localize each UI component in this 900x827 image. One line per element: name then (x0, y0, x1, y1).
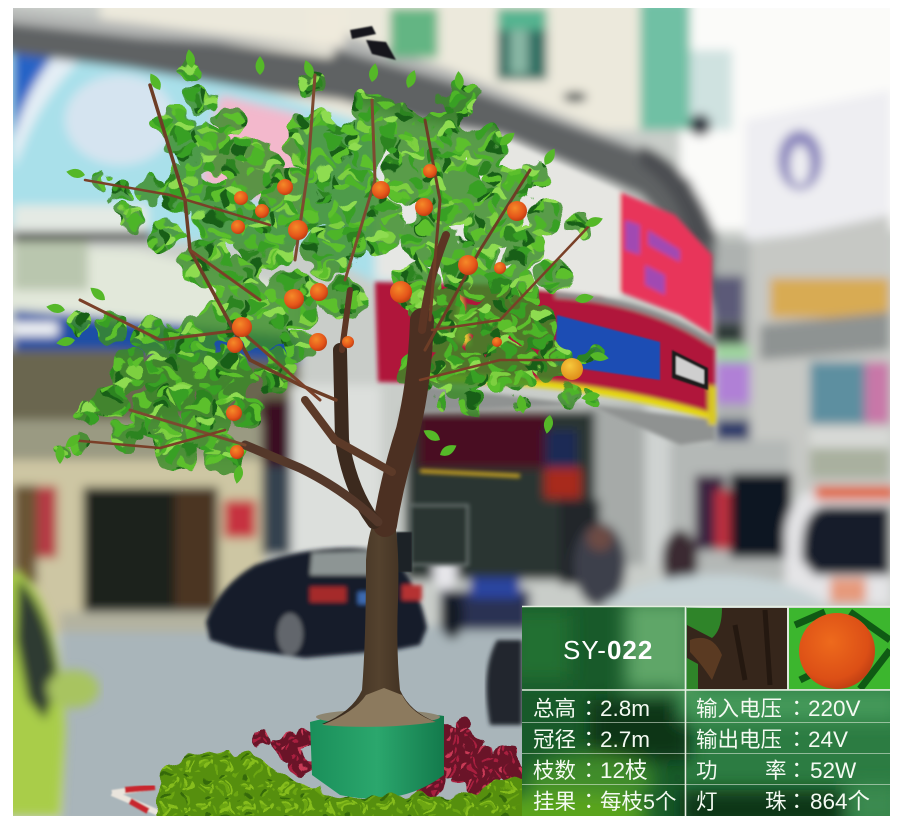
spec: branch count: ： (578, 759, 600, 783)
root flare (322, 688, 436, 727)
person beside trunk (396, 532, 412, 572)
spec: input voltage: 220V (808, 696, 861, 721)
spec: LED beads: ： (786, 790, 808, 814)
pavement (60, 626, 530, 826)
green foreground vehicle (0, 570, 99, 816)
spec: crown diameter: 冠径 (533, 728, 576, 752)
spec: crown diameter: 2.7m (600, 727, 650, 752)
spec: power (696, 758, 857, 783)
parked black car (206, 548, 427, 658)
panel grid lines (522, 606, 890, 816)
bystanders (574, 523, 626, 607)
foreground motorbike (486, 640, 522, 725)
spec: LED beads (696, 789, 870, 814)
street shop fronts (670, 440, 790, 580)
spec: total height: ： (578, 697, 600, 721)
spec: power: 率 (765, 759, 787, 783)
eave band (0, 10, 716, 310)
red fascia and signage (375, 138, 716, 565)
orange photo (789, 608, 890, 689)
spec: total height: 总高 (533, 697, 576, 721)
spec: total height (533, 696, 650, 721)
black sign (672, 350, 708, 390)
spec: input voltage (696, 696, 861, 721)
edge leaves (46, 49, 609, 484)
spec: branch count: 枝数 (533, 759, 576, 783)
spec: fruit: 每枝5个 (600, 790, 676, 814)
spec: input voltage: 输入电压 (696, 697, 782, 721)
shrubs (156, 750, 522, 816)
right billboard (745, 90, 890, 240)
spec: power: 功 (696, 759, 718, 783)
spec: branch count: 12枝 (600, 758, 648, 783)
right buildings (814, 213, 890, 238)
spec: LED beads: 864个 (810, 789, 870, 814)
red plants (253, 721, 523, 798)
oranges (226, 164, 527, 459)
spec: LED beads: 珠 (765, 790, 787, 814)
billboards left (0, 50, 390, 290)
spec: output voltage: ： (786, 728, 808, 752)
facade white strip (369, 125, 621, 284)
spec: power: 52W (810, 758, 857, 783)
grey column (588, 402, 648, 568)
spec panel (522, 606, 890, 816)
spec: crown diameter: ： (578, 728, 600, 752)
white tiled column (291, 385, 381, 555)
motorbike group (440, 590, 530, 630)
van (785, 490, 890, 605)
background parked car (600, 574, 830, 606)
lobby (405, 410, 595, 580)
spec: total height: 2.8m (600, 696, 650, 721)
model number: SY-022 (563, 635, 653, 665)
road barrier (112, 787, 166, 816)
spec: fruit: ： (578, 790, 600, 814)
teal tower (640, 0, 690, 130)
tree canopy leaf mass (58, 60, 602, 475)
left wall and shop (13, 340, 306, 427)
spec: branch count (533, 758, 648, 783)
planter (310, 710, 444, 799)
spec: output voltage: 输出电压 (696, 728, 782, 752)
spec: input voltage: ： (786, 697, 808, 721)
spec: output voltage: 24V (808, 727, 848, 752)
trunk and main limbs (70, 75, 590, 724)
spec: crown diameter (533, 727, 650, 752)
spec: LED beads: 灯 (696, 790, 718, 814)
windows (390, 8, 438, 58)
spec: fruit (533, 790, 676, 814)
panel backdrop (522, 607, 890, 816)
spec: output voltage (696, 727, 848, 752)
bark photo (687, 608, 787, 689)
spec: fruit: 挂果 (533, 790, 576, 814)
spec: power: ： (786, 759, 808, 783)
blue sign (555, 315, 660, 380)
yellow orange (561, 358, 583, 380)
floodlights (350, 26, 396, 60)
